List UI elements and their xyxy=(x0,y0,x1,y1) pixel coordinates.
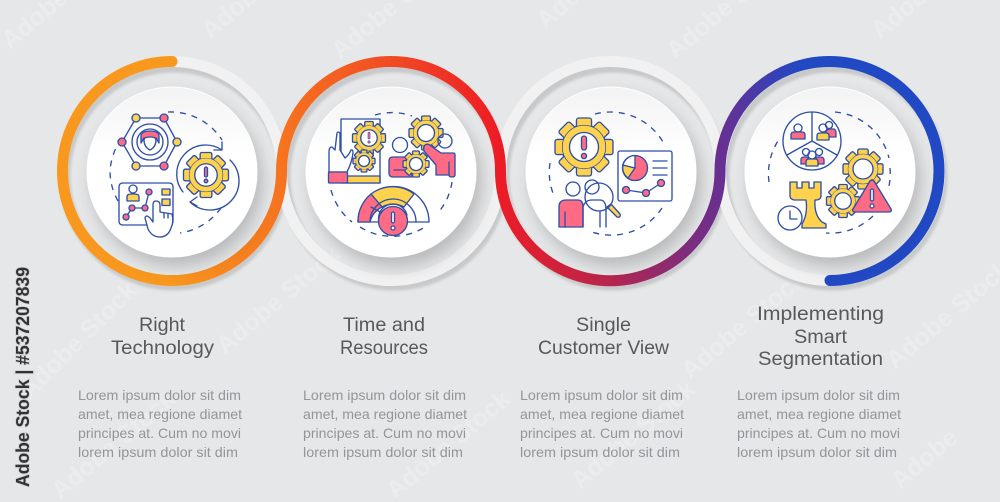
watermark: Adobe xyxy=(886,423,964,495)
title 4: Segmentation xyxy=(758,349,883,370)
body text 4: Lorem ipsum dolor sit dim xyxy=(737,387,900,403)
gauge with warning xyxy=(358,186,429,236)
disc 1 xyxy=(87,87,257,257)
gears with warning triangle xyxy=(826,149,891,218)
segment pie xyxy=(783,112,841,170)
dashed orbit xyxy=(768,112,890,233)
gear with warning xyxy=(555,118,613,176)
rook with clock xyxy=(778,182,826,230)
panel: single customer view xyxy=(520,87,696,460)
watermark: Adobe Stock xyxy=(211,240,346,360)
body text 2: principes at. Cum no movi xyxy=(303,425,466,441)
body text 4 xyxy=(737,387,901,460)
title 1: Technology xyxy=(111,338,215,359)
body text 1: principes at. Cum no movi xyxy=(78,425,241,441)
title 2: Resources xyxy=(340,338,428,359)
title 2: Time and xyxy=(343,315,425,336)
body text 3: lorem ipsum dolor sit dim xyxy=(520,444,680,460)
dashed orbit xyxy=(110,112,222,233)
customers under magnifier xyxy=(559,180,620,227)
title 2 xyxy=(340,315,428,359)
body text 2 xyxy=(303,387,467,460)
disc 2 xyxy=(306,87,476,257)
analytics card xyxy=(618,151,672,201)
ring shadows xyxy=(65,67,942,285)
icon: time and resources xyxy=(328,113,455,236)
body text 1: Lorem ipsum dolor sit dim xyxy=(78,387,241,403)
body text 3: amet, mea regione diamet xyxy=(520,406,684,422)
watermark: Adobe Stock xyxy=(566,375,701,495)
icon: single customer view xyxy=(549,112,672,235)
panel: time and resources xyxy=(303,87,476,460)
gear with cycle arrows xyxy=(177,142,239,210)
tablet with gears and hand xyxy=(328,119,386,183)
ring tracks xyxy=(62,62,940,280)
stock id label: Adobe Stock | #537207839 xyxy=(13,267,33,487)
title 3 xyxy=(538,315,669,359)
gradient ribbon connecting the four steps xyxy=(62,61,939,281)
watermark: Adobe Stock xyxy=(46,385,181,502)
body text 1 xyxy=(78,387,242,460)
watermark: Adobe Stock xyxy=(14,276,142,404)
body text 4: amet, mea regione diamet xyxy=(737,406,901,422)
body text 2: amet, mea regione diamet xyxy=(303,406,467,422)
body text 3: Lorem ipsum dolor sit dim xyxy=(520,387,683,403)
watermark: Adobe Stock xyxy=(676,265,811,385)
body text 4: lorem ipsum dolor sit dim xyxy=(737,444,897,460)
body text 4: principes at. Cum no movi xyxy=(737,425,900,441)
body text 3 xyxy=(520,387,684,460)
network hexagon xyxy=(118,114,181,170)
body text 2: Lorem ipsum dolor sit dim xyxy=(303,387,466,403)
panel: right technology xyxy=(78,87,257,460)
icon: smart segmentation xyxy=(768,112,891,233)
title 4: Implementing xyxy=(757,304,884,325)
title 3: Customer View xyxy=(538,338,669,359)
title 4 xyxy=(757,304,884,370)
icon: right technology xyxy=(110,112,239,237)
body text 3: principes at. Cum no movi xyxy=(520,425,683,441)
people with gears xyxy=(389,116,455,177)
dashed orbit xyxy=(549,112,663,235)
disc 4 xyxy=(745,87,915,257)
title 1: Right xyxy=(139,315,186,336)
touch card xyxy=(119,183,173,237)
title 3: Single xyxy=(576,315,631,336)
watermark: Adobe Stock xyxy=(381,385,516,502)
body text 1: amet, mea regione diamet xyxy=(78,406,242,422)
panel: implementing smart segmentation xyxy=(737,87,915,460)
body text 2: lorem ipsum dolor sit dim xyxy=(303,444,463,460)
title 1 xyxy=(111,315,215,359)
title 4: Smart xyxy=(794,327,848,348)
dashed orbit xyxy=(331,113,452,236)
disc 3 xyxy=(526,87,696,257)
body text 1: lorem ipsum dolor sit dim xyxy=(78,444,238,460)
